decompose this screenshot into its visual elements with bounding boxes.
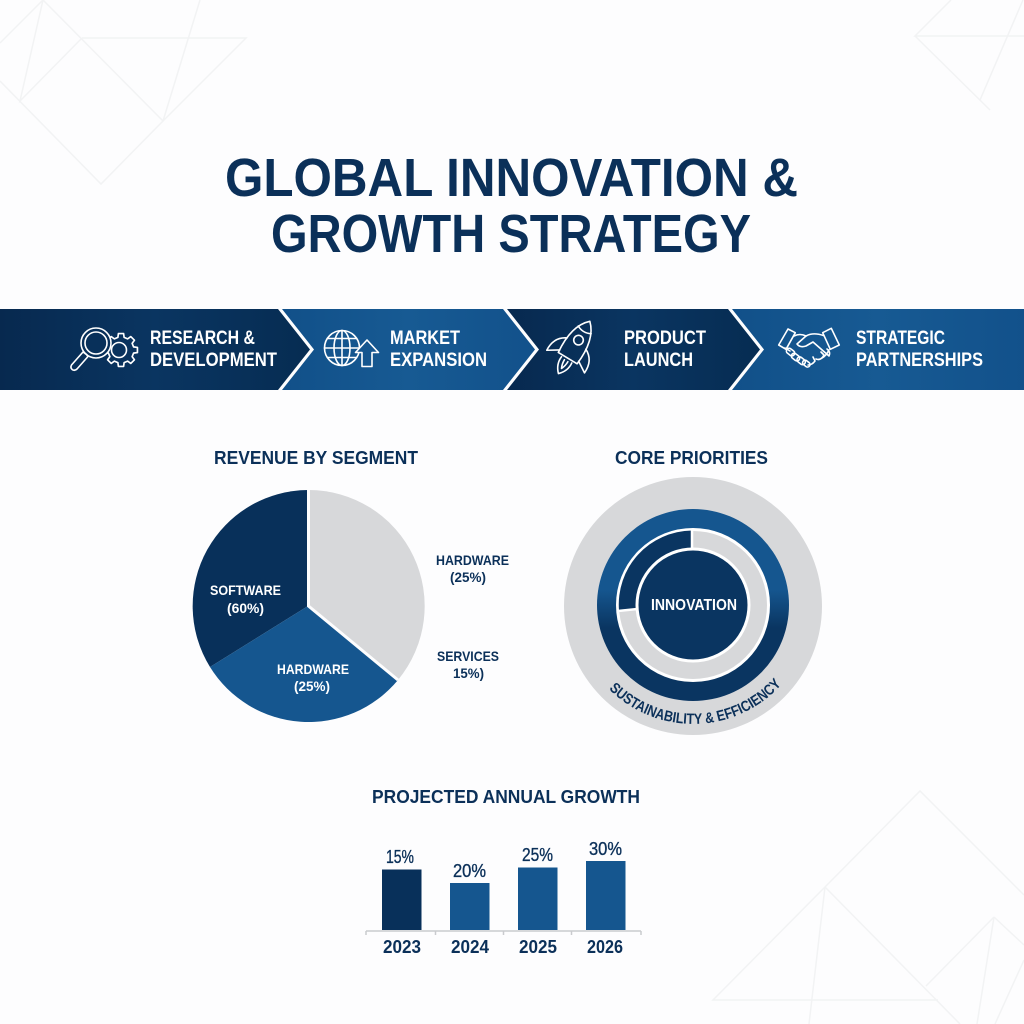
bar 2025: 2025	[519, 937, 557, 957]
heading: core priorities: CORE PRIORITIES	[615, 447, 768, 468]
bar 2023	[382, 847, 422, 957]
bar 2023: 15%	[386, 847, 414, 867]
heading: projected annual growth: PROJECTED ANNUAL GROWTH	[372, 786, 640, 807]
pie chart	[193, 488, 425, 722]
bar 2026: 30%	[589, 839, 622, 859]
process banner	[0, 309, 1024, 390]
step: market expansion: EXPANSION	[390, 350, 487, 371]
pie label: services: SERVICES	[437, 648, 499, 664]
bar 2026	[586, 839, 626, 957]
panel: core priorities	[564, 447, 822, 735]
panel: revenue by segment	[193, 447, 509, 722]
bar chart	[366, 839, 641, 957]
step: product launch: LAUNCH	[624, 350, 693, 371]
title	[225, 148, 798, 264]
step: market expansion: MARKET	[390, 328, 460, 349]
bar 2026: 2026	[587, 937, 623, 957]
step: product launch: PRODUCT	[624, 328, 706, 349]
step: research and development: DEVELOPMENT	[150, 350, 277, 371]
pie chart: HARDWARE	[277, 661, 349, 677]
bar 2025: 25%	[522, 845, 553, 865]
step: product launch	[507, 309, 760, 390]
bar 2024: 20%	[453, 861, 486, 881]
pie chart: SOFTWARE	[210, 582, 281, 598]
step: strategic partnerships	[732, 309, 1024, 390]
bar 2023: 2023	[383, 937, 421, 957]
step: strategic partnerships: PARTNERSHIPS	[856, 350, 983, 371]
icon: magnifier and gear	[71, 328, 137, 370]
pie label: hardware	[436, 552, 509, 585]
heading: revenue by segment: REVENUE BY SEGMENT	[214, 447, 419, 468]
bar 2025	[518, 845, 558, 957]
concentric ring diagram: SUSTAINABILITY & EFFICIENCY	[610, 678, 780, 724]
pie label: hardware: (25%)	[450, 569, 486, 585]
icon: handshake	[779, 328, 839, 368]
step: research and development: RESEARCH &	[150, 328, 255, 349]
pie chart: (25%)	[294, 678, 330, 694]
panel: projected annual growth	[366, 786, 641, 957]
bar 2024: 2024	[451, 937, 489, 957]
icon: globe with up arrow	[324, 330, 378, 366]
pie label: services	[437, 648, 499, 681]
step: market expansion	[282, 309, 535, 390]
title: GLOBAL INNOVATION &	[225, 148, 798, 208]
bar 2024	[450, 861, 490, 957]
icon: rocket	[540, 310, 609, 385]
step: research and development	[0, 309, 310, 390]
concentric ring diagram: INNOVATION	[651, 597, 737, 614]
pie label: services: 15%)	[453, 665, 484, 681]
pie chart: (60%)	[227, 600, 264, 616]
title: GROWTH STRATEGY	[271, 204, 751, 264]
concentric ring diagram	[564, 477, 822, 735]
step: strategic partnerships: STRATEGIC	[856, 328, 945, 349]
pie label: hardware: HARDWARE	[436, 552, 509, 568]
